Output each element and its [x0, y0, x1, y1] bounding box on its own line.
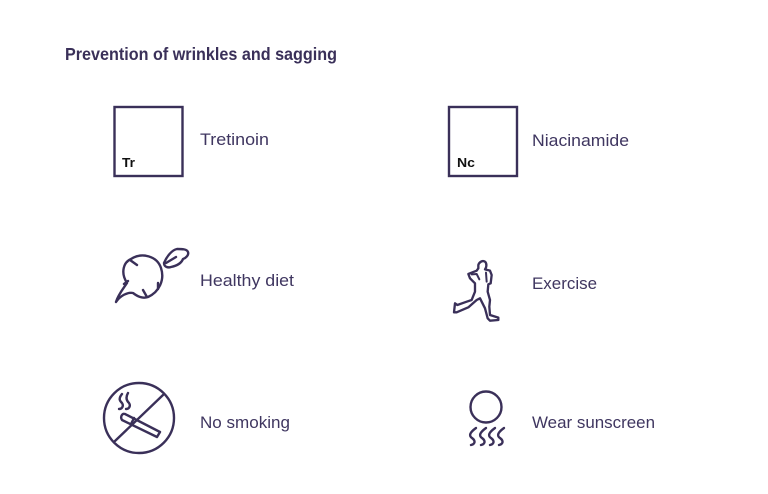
label: Healthy diet: Healthy diet: [200, 271, 294, 290]
icon: Nc element square: [449, 107, 517, 176]
item: Exercise: [454, 261, 597, 321]
label: Niacinamide: Niacinamide: [532, 131, 629, 150]
label: Wear sunscreen: Wear sunscreen: [532, 413, 655, 432]
item: Wear sunscreen: [470, 392, 655, 445]
label: Tretinoin: Tretinoin: [200, 130, 269, 149]
label: Exercise: Exercise: [532, 274, 597, 293]
icon: Tr element square: [114, 107, 182, 176]
label: No smoking: No smoking: [200, 413, 290, 432]
title: Prevention of wrinkles and sagging: [65, 44, 337, 64]
item: Healthy diet: [116, 249, 294, 302]
icon: no smoking: [104, 383, 174, 453]
icon: sun and waves: [470, 392, 504, 445]
item: Tretinoin: [114, 107, 269, 176]
item: Niacinamide: [449, 107, 629, 176]
icon: Tr element square: Tr: [122, 156, 135, 170]
icon: beet: [116, 249, 188, 302]
icon: Nc element square: Nc: [457, 156, 475, 170]
item: No smoking: [104, 383, 290, 453]
icon: runner: [454, 261, 498, 321]
